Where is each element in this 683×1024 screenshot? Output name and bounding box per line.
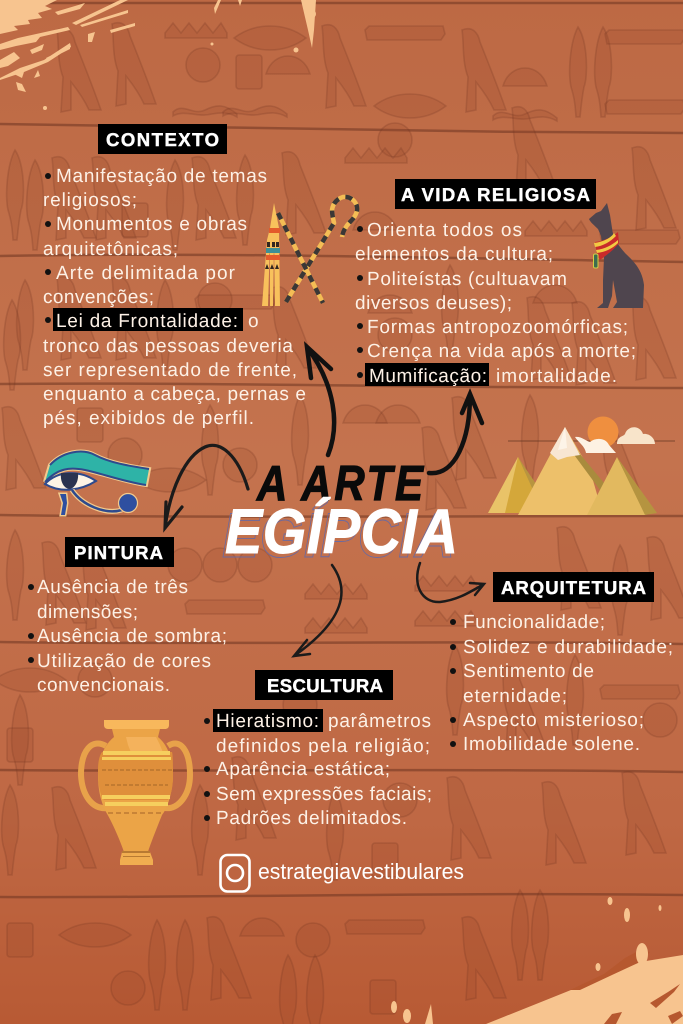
vida religiosa text: diversos deuses); xyxy=(355,293,512,314)
icon: eye of Horus xyxy=(45,452,149,515)
arquitetura text: Imobilidade solene. xyxy=(463,734,640,755)
icon: black cat statue xyxy=(589,203,644,308)
icon: instagram logo xyxy=(220,855,250,892)
vida religiosa text: Crença na vida após a morte; xyxy=(367,341,636,362)
vida religiosa text: Politeístas (cultuavam xyxy=(367,269,567,290)
contexto text: pés, exibidos de perfil. xyxy=(43,408,254,429)
bullets xyxy=(357,226,363,378)
pintura text: Ausência de três xyxy=(37,577,188,598)
highlight: Hieratismo xyxy=(213,709,323,732)
heading: a vida religiosa: A VIDA RELIGIOSA xyxy=(401,184,590,205)
arquitetura text xyxy=(463,612,673,755)
paint splatter: bottom right xyxy=(391,897,683,1024)
escultura text: Aparência estática; xyxy=(216,759,390,780)
title: A Arte Egípcia: EGÍPCIA xyxy=(222,500,455,571)
bullets xyxy=(28,584,34,663)
arrow: title to contexto xyxy=(307,347,334,455)
title: A Arte Egípcia xyxy=(222,456,458,571)
panel: arquitetura xyxy=(450,572,673,755)
vida religiosa text: Formas antropozoomórficas; xyxy=(367,317,628,338)
pintura text: convencionais. xyxy=(37,675,170,696)
contexto text: convenções; xyxy=(43,287,154,308)
arrow: title to escultura xyxy=(294,565,341,656)
instagram handle: estrategiavestibulares xyxy=(258,859,464,884)
arquitetura text: Sentimento de xyxy=(463,661,594,682)
vida religiosa text: Orienta todos os xyxy=(367,220,522,241)
panel: pintura xyxy=(28,537,227,696)
arrow: title to arquitetura xyxy=(417,563,484,602)
vida religiosa text: Mumificação: xyxy=(369,366,487,387)
heading: escultura xyxy=(255,670,393,700)
pintura text: Utilização de cores xyxy=(37,651,211,672)
contexto text: Manifestação de temas xyxy=(56,166,267,187)
heading: a vida religiosa xyxy=(395,179,596,209)
heading: arquitetura: ARQUITETURA xyxy=(501,577,646,598)
arquitetura text: Funcionalidade; xyxy=(463,612,605,633)
contexto text: o xyxy=(248,311,259,332)
vida religiosa text: imortalidade. xyxy=(496,366,617,387)
contexto text: arquitetônicas; xyxy=(43,239,178,260)
icon: Egyptian vase xyxy=(81,720,190,865)
heading: contexto: CONTEXTO xyxy=(106,129,219,150)
contexto text: religiosos; xyxy=(43,190,137,211)
highlight: Lei da Frontalidade xyxy=(53,308,243,331)
heading: arquitetura xyxy=(493,572,654,602)
pintura text xyxy=(37,577,227,696)
heading: pintura xyxy=(65,537,174,567)
pintura text: dimensões; xyxy=(37,602,138,623)
highlight: Mumificação xyxy=(365,363,489,386)
flail strands xyxy=(262,203,280,306)
icon: crook and flail xyxy=(262,197,357,306)
contexto text: Monumentos e obras xyxy=(56,214,247,235)
escultura text: Padrões delimitados. xyxy=(216,808,407,829)
panel: contexto xyxy=(43,124,306,429)
escultura text: Hieratismo: xyxy=(216,711,319,732)
heading: escultura: ESCULTURA xyxy=(267,675,383,696)
escultura text: Sem expressões faciais; xyxy=(216,784,432,805)
panel: a vida religiosa xyxy=(355,179,636,387)
heading: pintura: PINTURA xyxy=(74,542,163,563)
contexto text: Arte delimitada por xyxy=(56,263,236,284)
bullets xyxy=(45,173,51,323)
vida religiosa text: elementos da cultura; xyxy=(355,244,553,265)
title: A Arte Egípcia: A ARTE xyxy=(256,456,425,511)
vida religiosa text xyxy=(355,220,636,387)
panel: escultura xyxy=(204,670,432,829)
arquitetura text: Aspecto misterioso; xyxy=(463,710,644,731)
pintura text: Ausência de sombra; xyxy=(37,626,227,647)
contexto text: ser representado de frente, xyxy=(43,360,297,381)
heading: contexto xyxy=(98,124,227,154)
arrow: title to vida religiosa xyxy=(429,394,482,473)
title: A Arte Egípcia: EGÍPCIA xyxy=(225,496,458,567)
escultura text xyxy=(216,711,432,829)
icon: pyramids with sun and clouds xyxy=(488,416,675,515)
paint splatter: top left xyxy=(0,0,316,110)
escultura text: definidos pela religião; xyxy=(216,736,430,757)
contexto text: tronco das pessoas deveria xyxy=(43,336,293,357)
escultura text: parâmetros xyxy=(328,711,431,732)
bullets xyxy=(450,619,456,747)
contexto text xyxy=(43,166,306,429)
contexto text: Lei da Frontalidade: xyxy=(56,311,238,332)
arrow: title to pintura xyxy=(165,445,248,528)
crossed staffs xyxy=(278,197,357,303)
arquitetura text: eternidade; xyxy=(463,686,567,707)
arquitetura text: Solidez e durabilidade; xyxy=(463,637,673,658)
contexto text: enquanto a cabeça, pernas e xyxy=(43,384,306,405)
bullets xyxy=(204,718,210,821)
